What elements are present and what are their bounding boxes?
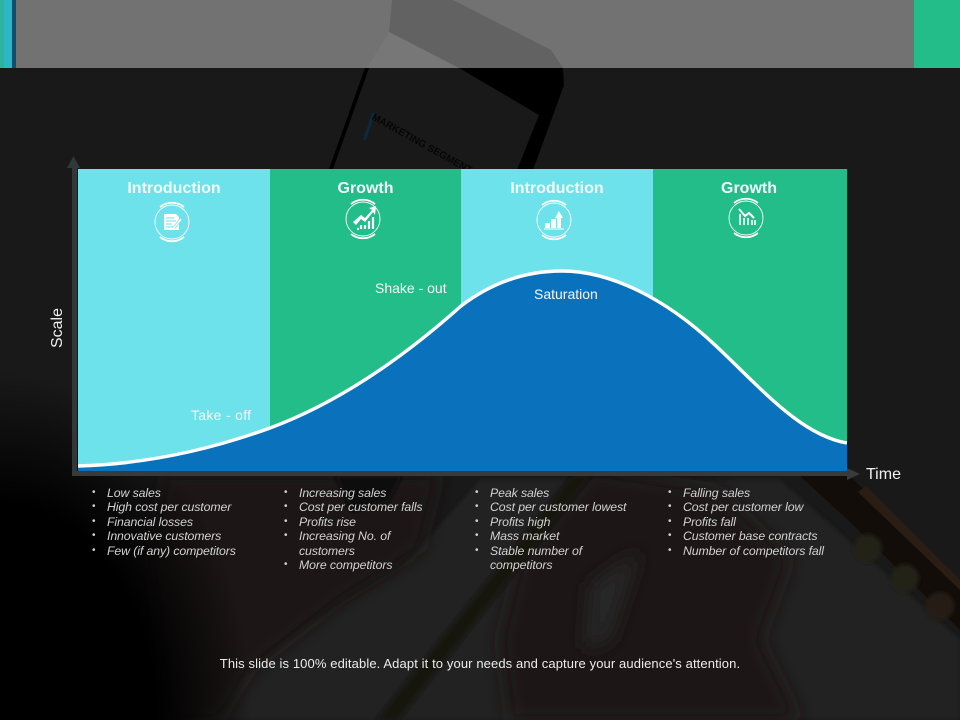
heading: introduction 1: Introduction xyxy=(127,180,221,197)
curve line xyxy=(78,271,847,466)
panel: growth 2 xyxy=(653,169,847,471)
text block: decline points: Number of competitors fall xyxy=(683,544,824,558)
text block: peak points xyxy=(475,486,627,572)
text block: introduction points xyxy=(92,486,236,558)
icon: rising chart xyxy=(346,200,380,238)
right accent block xyxy=(914,0,960,68)
x axis arrow xyxy=(72,468,860,480)
text block: introduction points: High cost per customer xyxy=(107,500,231,514)
label: saturation: Saturation xyxy=(534,286,598,302)
phone silhouette in band xyxy=(389,0,563,68)
text block: growth points: Cost per customer falls xyxy=(299,500,422,514)
background: left shadow xyxy=(0,360,260,720)
top title band xyxy=(16,0,914,68)
text block: decline points xyxy=(668,486,824,558)
text block: introduction points: Low sales xyxy=(107,486,161,500)
heading: growth 1: Growth xyxy=(338,180,394,197)
text block: peak points: Profits high xyxy=(490,515,550,529)
text block: peak points: Peak sales xyxy=(490,486,549,500)
text block: growth points: More competitors xyxy=(299,558,392,572)
text block: introduction points: Innovative customers xyxy=(107,529,221,543)
icon: document xyxy=(155,203,189,241)
footer caption: This slide is 100% editable. Adapt it to your needs and capture your audience's attention. xyxy=(220,656,740,671)
panel: introduction 1 xyxy=(78,169,270,471)
text block: decline points: Profits fall xyxy=(683,515,736,529)
background: phone xyxy=(459,68,564,170)
text block: growth points: Increasing No. of customers xyxy=(299,529,390,558)
background: hand left xyxy=(150,474,440,720)
text block: growth points xyxy=(284,486,422,572)
icon: bars with arrow xyxy=(537,201,571,239)
text block: decline points: Customer base contracts xyxy=(683,529,817,543)
text block: decline points: Cost per customer low xyxy=(683,500,803,514)
left accent strip xyxy=(0,0,16,68)
text block: introduction points: Financial losses xyxy=(107,515,193,529)
phone screen text: MARKETING SEGMENT xyxy=(370,112,474,176)
text block: growth points: Profits rise xyxy=(299,515,356,529)
heading: growth 2: Growth xyxy=(721,180,777,197)
y axis arrow xyxy=(67,156,80,476)
panel: introduction 2 xyxy=(461,169,653,471)
text block: decline points: Falling sales xyxy=(683,486,750,500)
icon: falling chart xyxy=(729,199,763,237)
label: take-off: Take - off xyxy=(191,407,251,423)
text block: peak points: Mass market xyxy=(490,529,559,543)
text block: peak points: Stable number of competitors xyxy=(490,544,582,572)
background: paper xyxy=(190,480,960,720)
background: hand right xyxy=(500,470,800,720)
text block: introduction points: Few (if any) competitors xyxy=(107,544,236,558)
text block: growth points: Increasing sales xyxy=(299,486,386,500)
text block: peak points: Cost per customer lowest xyxy=(490,500,626,514)
axis label: scale: Scale xyxy=(49,308,66,348)
panel: growth 1 xyxy=(270,169,461,471)
axis label: time: Time xyxy=(866,466,901,483)
background: notebook edge xyxy=(800,476,960,630)
label: shake-out: Shake - out xyxy=(375,280,447,296)
background: pen xyxy=(376,474,592,720)
background: phone bottom xyxy=(335,476,402,512)
heading: introduction 2: Introduction xyxy=(510,180,604,197)
area under curve xyxy=(78,271,847,471)
